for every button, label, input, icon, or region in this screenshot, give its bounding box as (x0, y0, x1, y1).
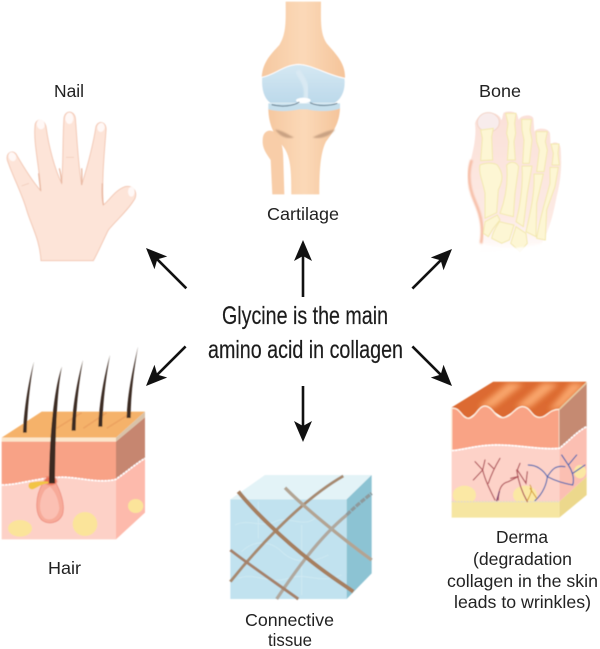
label: Derma: leads to wrinkles) (454, 592, 591, 612)
blood vessels (473, 455, 585, 502)
arrow: to connective tissue (294, 386, 312, 442)
follicle (37, 480, 63, 523)
label: Nail: Nail (54, 81, 84, 101)
arrow: to nail (140, 242, 193, 295)
illustration: skin block with hair follicle (2, 347, 145, 539)
illustration: skin block with wrinkles (derma) (450, 380, 588, 518)
illustration: hand (nail) (7, 112, 136, 261)
fat deposits (8, 499, 143, 537)
meniscus (268, 103, 340, 111)
label: Derma: Derma (496, 527, 548, 547)
arrow: to hair (140, 340, 192, 392)
label: Derma: (degradation (473, 549, 572, 569)
label: Cartilage: Cartilage (267, 204, 339, 224)
label: Derma (447, 527, 598, 612)
label: Hair: Hair (48, 558, 81, 578)
label: Derma: collagen in the skin (447, 571, 598, 591)
arrow: to derma (406, 340, 458, 392)
title: central statement: Glycine is the main (222, 302, 388, 330)
articular cartilage (262, 64, 345, 103)
label: Connective tissue (245, 610, 334, 649)
sebaceous gland (29, 481, 48, 489)
illustration: connective tissue cube (230, 475, 372, 599)
arrow: to bone (406, 243, 458, 295)
arrow: to cartilage (294, 240, 312, 297)
fibula (263, 131, 284, 194)
label: Connective tissue: Connective (245, 610, 334, 630)
fat deposits (453, 465, 586, 504)
illustration: foot bones (468, 112, 561, 258)
yellow base layer (452, 502, 559, 518)
label: Bone: Bone (479, 81, 521, 101)
tibia (268, 108, 340, 194)
femur (262, 2, 345, 80)
title: central statement (208, 302, 403, 364)
illustration: knee joint (cartilage) (262, 2, 345, 194)
hair strands (23, 347, 138, 483)
title: central statement: amino acid in collagen (208, 336, 403, 364)
